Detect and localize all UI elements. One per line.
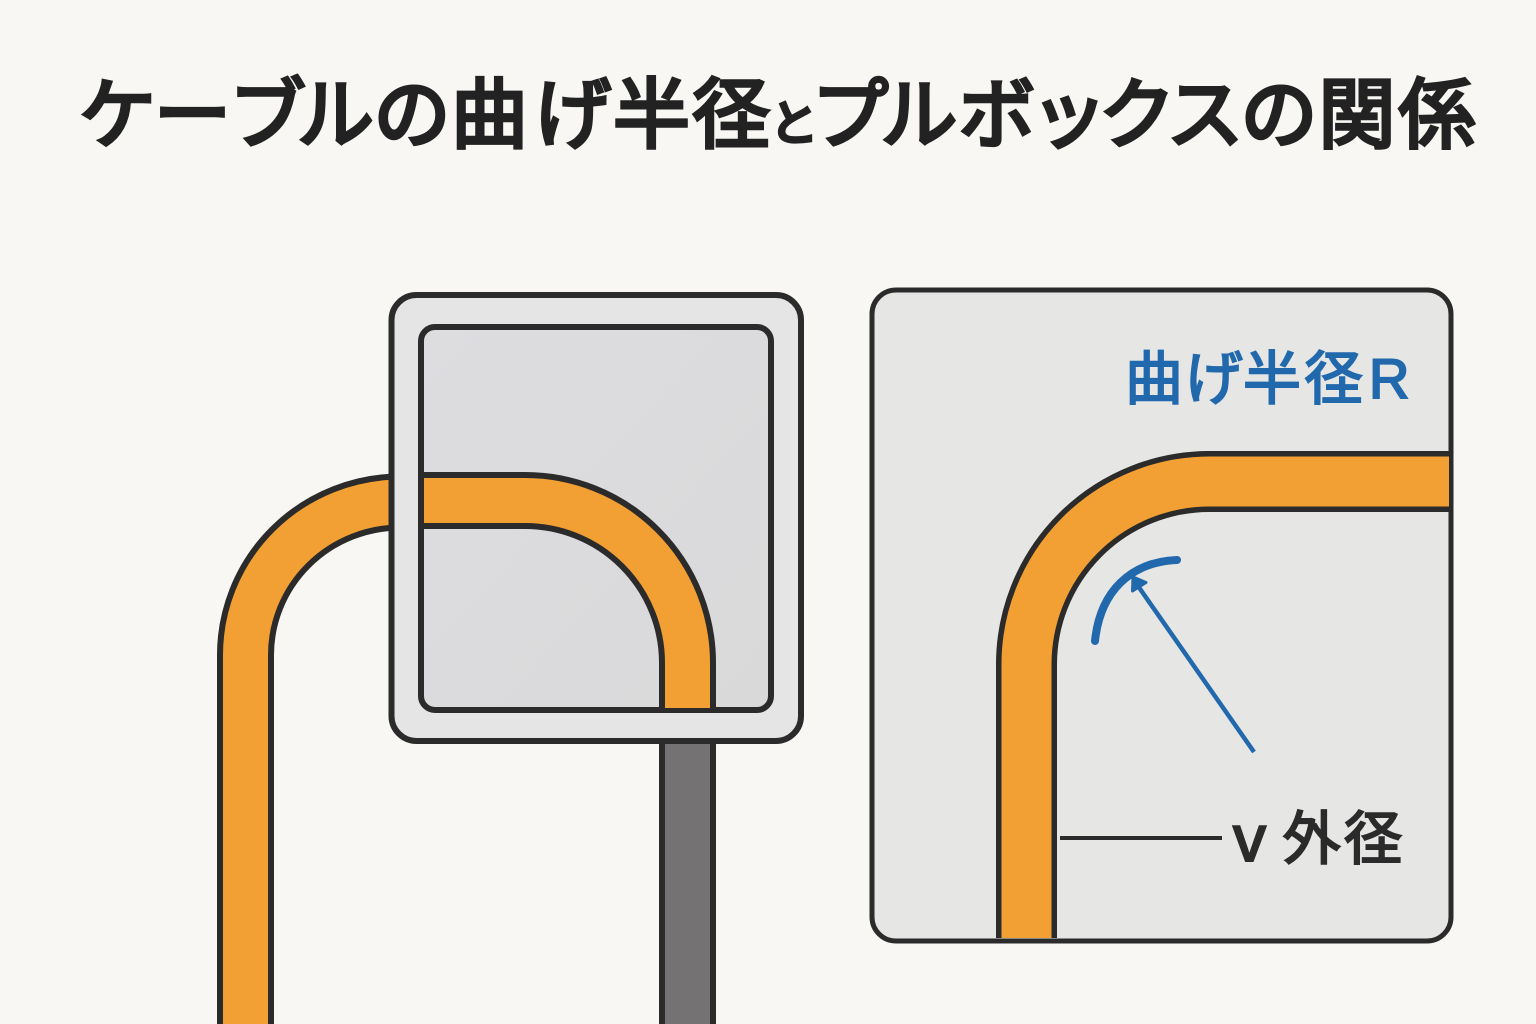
pull box inner panel — [421, 327, 771, 710]
detail panel — [872, 290, 1451, 941]
bend radius label: 曲げ半径 — [1125, 347, 1363, 412]
radius arrow — [1132, 577, 1254, 752]
grey conduit below the box — [662, 735, 713, 1024]
outer diameter label: 外径 — [1282, 807, 1402, 872]
outer diameter label: v — [1233, 801, 1266, 875]
title: と — [770, 98, 818, 151]
title: ケーブルの曲げ半径 — [79, 73, 770, 159]
detail panel background — [872, 290, 1451, 941]
outer diameter leader line — [1060, 836, 1222, 840]
title: プルボックスの関係 — [812, 73, 1476, 159]
pull box outer shell — [392, 295, 801, 741]
left cable outside the box — [246, 502, 400, 1024]
detail cable — [1026, 482, 1449, 938]
pull box — [392, 295, 801, 741]
bend radius arc — [1095, 560, 1177, 641]
cable inside box — [424, 500, 688, 708]
bend radius label: R — [1369, 347, 1409, 410]
